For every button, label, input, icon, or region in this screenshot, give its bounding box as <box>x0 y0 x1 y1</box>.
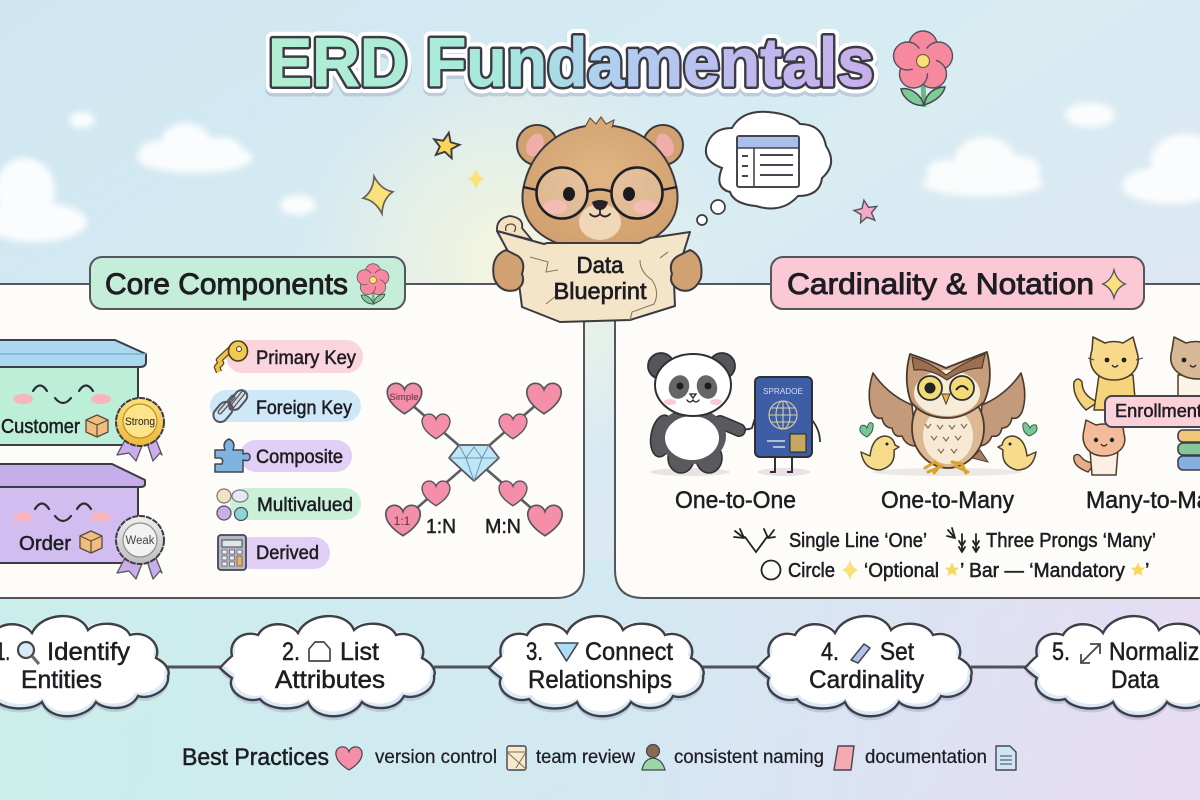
bear hands <box>493 250 702 291</box>
entity: customer <box>0 340 146 445</box>
title: ERD Fundamentals <box>268 24 874 101</box>
best practices row <box>182 744 1016 771</box>
decorative stars <box>359 130 879 223</box>
badge: strong: Strong <box>125 416 155 428</box>
entity: customer: Customer <box>1 416 80 438</box>
step 3: Connect <box>585 638 673 666</box>
thought bubble with table <box>697 112 831 225</box>
map: Data <box>576 252 624 278</box>
step 1 <box>0 615 169 720</box>
icon: document <box>996 746 1016 770</box>
icon: circle <box>762 560 780 580</box>
notation legend: ‘Optional <box>864 560 939 582</box>
step 5: Data <box>1111 666 1159 694</box>
step 2: 2. <box>282 638 300 666</box>
diagram: attribute types network: M:N <box>485 516 521 538</box>
step 4: 4. <box>821 638 839 666</box>
step 2 <box>220 615 435 720</box>
panel: cardinality and notation <box>615 284 1200 598</box>
diagram: attribute types network: Simple <box>390 392 418 402</box>
diagram: attribute types network: 1:1 <box>394 514 411 528</box>
step 4: Set <box>880 638 914 666</box>
heading: core components: Core Components <box>105 268 348 301</box>
diagram: attribute types network: 1:N <box>426 516 456 538</box>
best practices row: consistent naming <box>674 747 824 768</box>
attribute: derived: Derived <box>256 543 319 564</box>
map <box>497 216 690 322</box>
heading: cardinality and notation <box>771 257 1144 309</box>
step 2: List <box>340 638 379 666</box>
step 5 <box>1025 615 1200 720</box>
icon: table <box>737 136 799 187</box>
step 1: Entities <box>21 666 102 694</box>
best practices row: documentation <box>865 747 987 768</box>
heading: cardinality and notation: Cardinality & Notation <box>787 268 1094 301</box>
icon: three prongs <box>947 528 979 552</box>
step 4: Cardinality <box>809 666 924 694</box>
title: ERD Fundamentals <box>268 24 874 101</box>
attribute: primary key: Primary Key <box>256 348 356 369</box>
illustration: owl with chicks <box>860 352 1037 476</box>
label: one-to-one: One-to-One <box>675 487 796 514</box>
bear head <box>522 117 678 250</box>
best practices row: Best Practices <box>182 744 329 771</box>
step 3: 3. <box>526 638 543 666</box>
notation legend: Three Prongs ‘Many’ <box>986 530 1156 552</box>
icon: star 2 <box>1131 562 1145 576</box>
diagram: attribute types network <box>386 383 562 538</box>
attribute: foreign key <box>210 388 361 425</box>
tag: enrollment: Enrollment <box>1115 401 1200 421</box>
icon: star <box>945 562 959 576</box>
best practices row: team review <box>536 747 635 768</box>
panel: core components <box>0 284 584 598</box>
illustration: panda and passport: SPRADOE <box>763 386 803 396</box>
heading: core components <box>90 257 405 309</box>
entity: order: Order <box>19 533 71 555</box>
map: Blueprint <box>554 278 647 304</box>
notation legend <box>734 528 1156 582</box>
icon: person <box>642 744 665 770</box>
books <box>1178 430 1200 470</box>
step 1: Identify <box>47 638 131 666</box>
mascot: bear with map <box>493 117 702 322</box>
icon: book <box>834 746 854 770</box>
cat brown <box>1171 337 1200 410</box>
badge: weak: Weak <box>126 535 155 547</box>
illustration: cats, enrollment tag and books <box>1074 337 1200 475</box>
attribute: derived <box>218 535 330 570</box>
attribute: primary key <box>217 340 363 373</box>
attribute: composite <box>215 439 352 472</box>
step 2: Attributes <box>275 666 385 694</box>
icon: heart <box>336 747 362 770</box>
cat orange <box>1074 420 1125 475</box>
attribute: foreign key: Foreign Key <box>256 398 352 419</box>
step 4 <box>757 615 972 720</box>
icon: diamond <box>449 445 499 481</box>
best practices row: version control <box>375 747 497 768</box>
notation legend: ’ Bar — ‘Mandatory <box>960 560 1125 582</box>
attribute: multivalued <box>217 488 361 520</box>
cat yellow <box>1074 337 1143 410</box>
label: one-to-many: One-to-Many <box>881 487 1014 514</box>
bear ears <box>517 125 683 165</box>
icon: note <box>507 746 526 770</box>
notation legend: ’ <box>1145 560 1149 582</box>
icon: title flower <box>894 31 952 107</box>
badge: strong <box>116 398 164 461</box>
tag: enrollment <box>1105 396 1200 427</box>
step 3: Relationships <box>528 666 672 694</box>
icon: sparkle <box>842 560 858 580</box>
title: ERD Fundamentals <box>268 24 874 101</box>
notation legend: Circle <box>788 560 835 582</box>
process steps <box>0 615 1200 720</box>
step 5: 5. <box>1052 638 1070 666</box>
attribute: multivalued: Multivalued <box>257 495 353 516</box>
entity: order <box>0 464 145 563</box>
attribute: composite: Composite <box>256 447 343 468</box>
badge: weak <box>116 516 164 579</box>
notation legend: Single Line ‘One’ <box>789 530 927 552</box>
icon: single line crow foot <box>734 529 775 552</box>
step 3 <box>489 615 704 720</box>
illustration: panda and passport <box>648 353 820 476</box>
title: ERD Fundamentals <box>268 27 874 104</box>
